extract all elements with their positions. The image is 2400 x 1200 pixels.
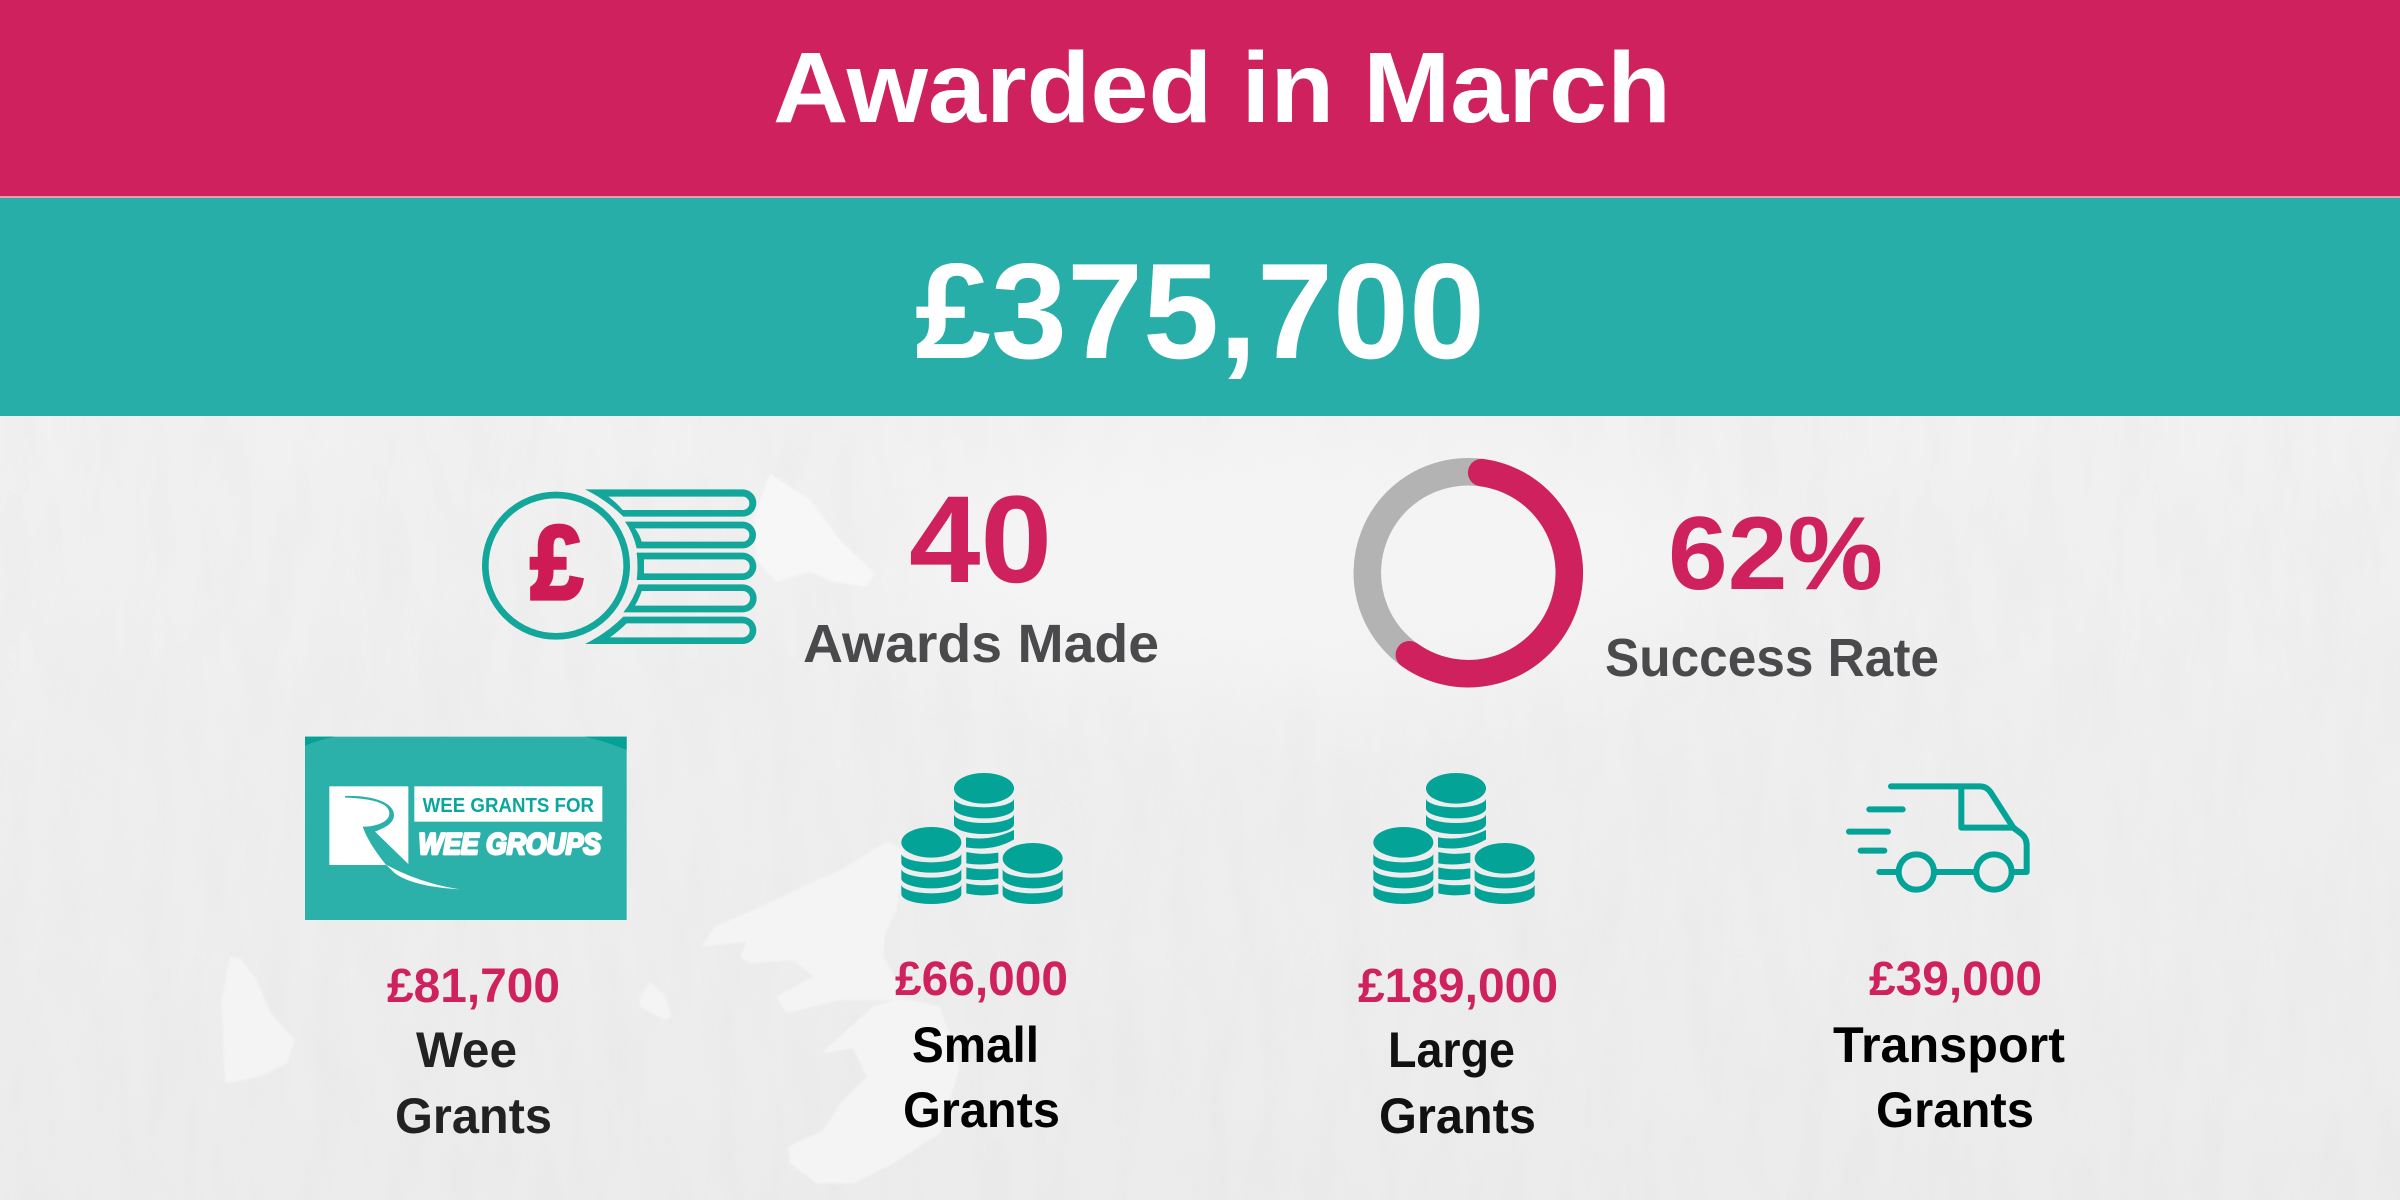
label line 2: Grants bbox=[1876, 1082, 2034, 1138]
icon: delivery van bbox=[1849, 786, 2027, 890]
label: Transport bbox=[1833, 1017, 2065, 1073]
label line 2: Grants bbox=[903, 1082, 1060, 1138]
label: Large bbox=[1388, 1022, 1515, 1078]
column: wee grants bbox=[305, 737, 627, 1144]
title banner bbox=[0, 0, 2400, 197]
amount: £39,000 bbox=[1869, 953, 2042, 1006]
label line 2: Grants bbox=[395, 1088, 552, 1144]
paper background bbox=[0, 416, 2400, 1200]
title: Awarded in March bbox=[773, 32, 1671, 144]
icon: coin stacks bbox=[1373, 773, 1535, 904]
icon: coin stacks bbox=[901, 773, 1063, 904]
logo: wee grants for wee groups: WEE GROUPS bbox=[418, 828, 601, 861]
column: large grants bbox=[1358, 773, 1558, 1144]
label: Wee bbox=[416, 1022, 517, 1078]
column: transport grants bbox=[1833, 786, 2065, 1138]
label line 2: Grants bbox=[1379, 1088, 1536, 1144]
amount: £66,000 bbox=[895, 953, 1068, 1006]
success label: Success Rate bbox=[1605, 628, 1939, 688]
band divider bbox=[0, 196, 2400, 198]
column: small grants bbox=[895, 773, 1068, 1138]
awards count: 40 bbox=[909, 471, 1052, 609]
amount: £81,700 bbox=[387, 960, 560, 1013]
awards label: Awards Made bbox=[803, 614, 1159, 674]
logo: wee grants for wee groups: WEE GRANTS FOR bbox=[423, 794, 594, 817]
awards made stat bbox=[485, 471, 1159, 674]
total amount banner bbox=[0, 198, 2400, 416]
success rate stat bbox=[1355, 459, 1939, 688]
success percentage: 62% bbox=[1668, 496, 1883, 612]
label: Small bbox=[912, 1017, 1039, 1073]
donut chart: 62 percent bbox=[1355, 459, 1582, 686]
icon: pound coin with stack bbox=[485, 489, 757, 644]
amount: £189,000 bbox=[1358, 960, 1558, 1013]
logo: wee grants for wee groups bbox=[305, 737, 627, 920]
total amount: £375,700 bbox=[915, 235, 1485, 387]
icon: pound sign: £ bbox=[531, 505, 583, 621]
